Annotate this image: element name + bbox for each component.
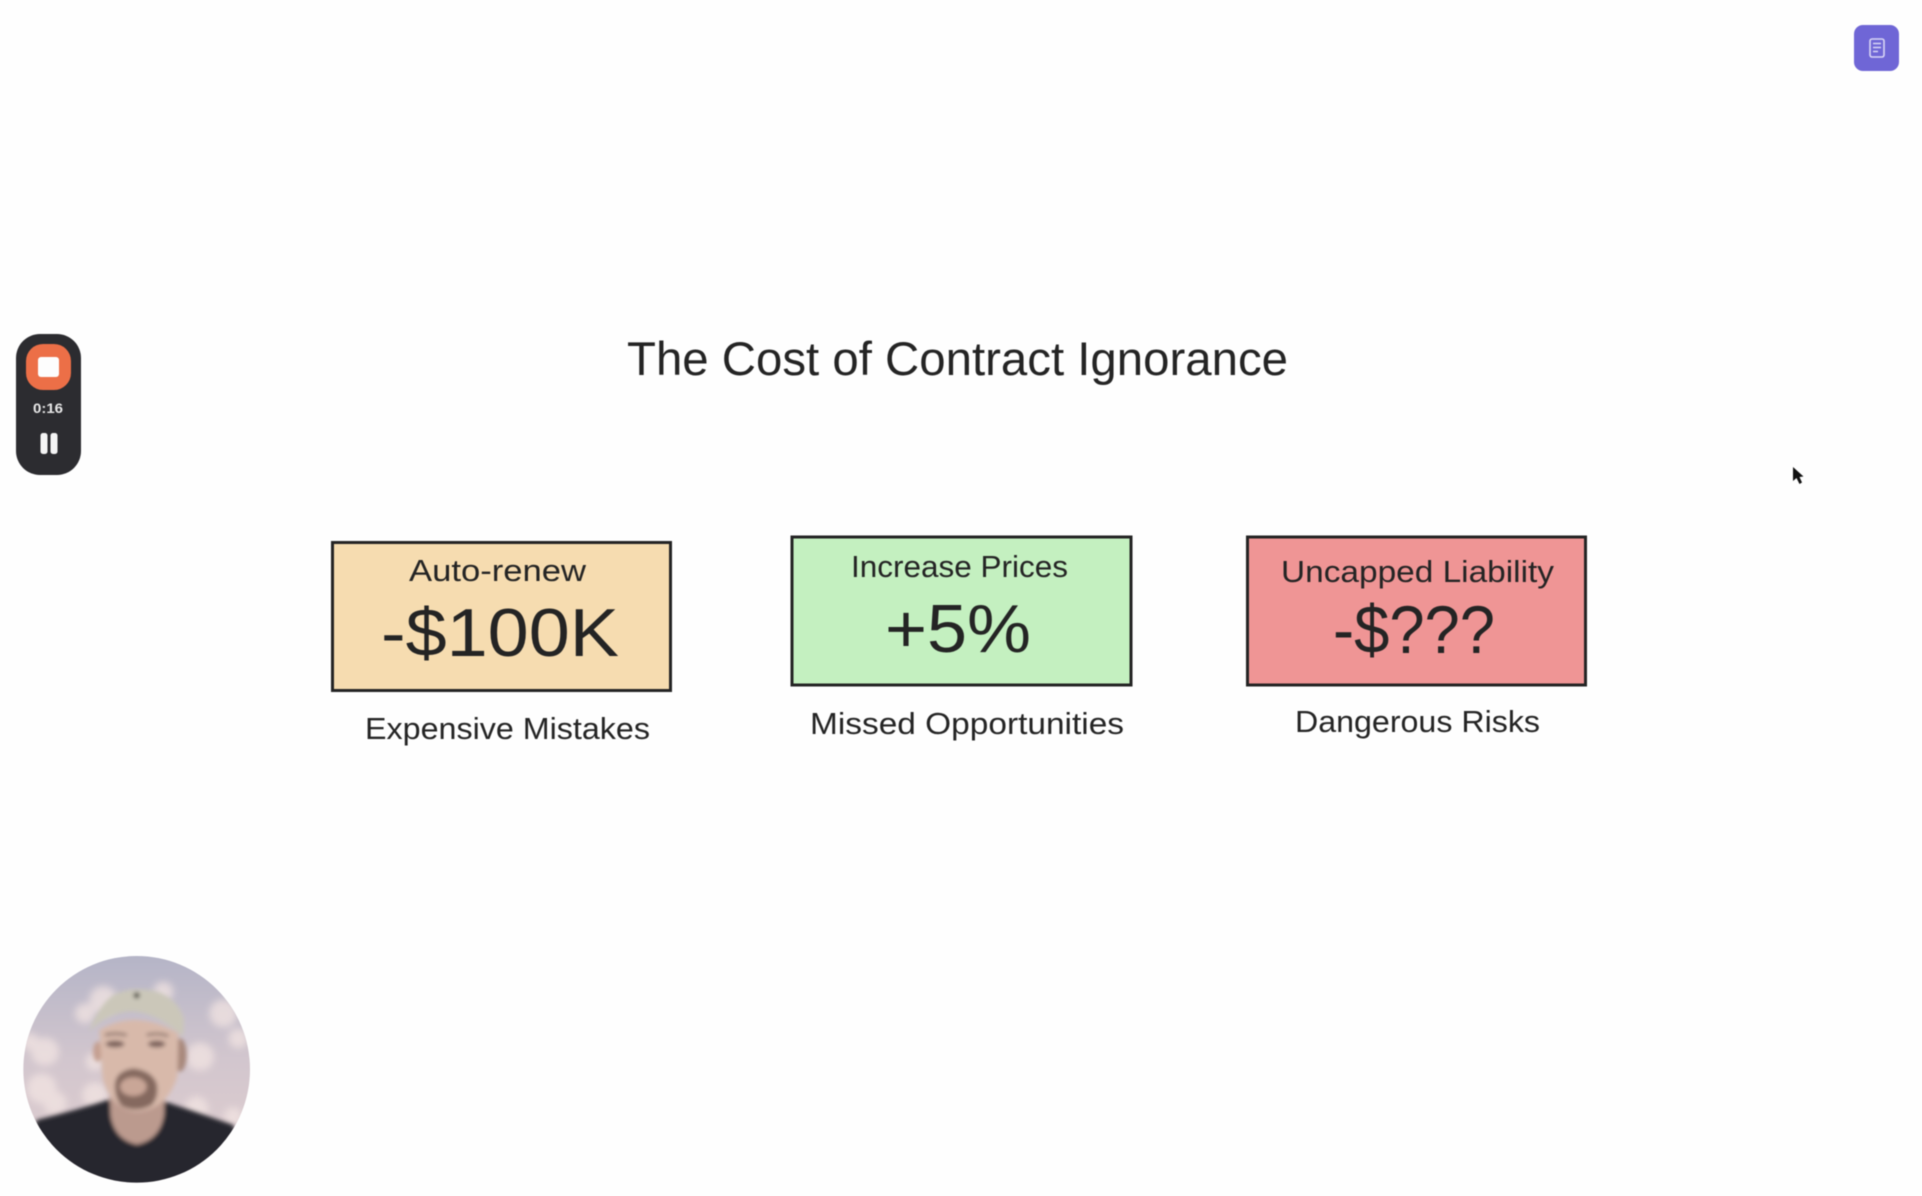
face bbox=[99, 1020, 178, 1112]
ears bbox=[93, 1042, 102, 1062]
beard bbox=[115, 1068, 157, 1109]
card value: +5% bbox=[885, 591, 1031, 667]
presenter webcam bubble bbox=[20, 953, 253, 1193]
notes button bbox=[1854, 25, 1899, 71]
neck bbox=[109, 1087, 165, 1145]
chin and mouth bbox=[120, 1077, 147, 1096]
card label: Auto-renew bbox=[409, 553, 587, 588]
panel: expensive mistakes bbox=[332, 542, 670, 746]
eyes bbox=[106, 1041, 124, 1047]
caption: Expensive Mistakes bbox=[365, 711, 650, 746]
panel: dangerous risks bbox=[1248, 537, 1586, 739]
cap bbox=[89, 989, 184, 1037]
icon: pause bbox=[40, 433, 58, 454]
card: uncapped liability bbox=[1248, 537, 1586, 685]
icon: stop button bbox=[26, 344, 71, 390]
timer: 0:16 bbox=[33, 400, 63, 416]
card label: Increase Prices bbox=[851, 549, 1068, 584]
icon: mouse cursor bbox=[1793, 467, 1804, 484]
recorder control pill bbox=[16, 334, 81, 475]
card value: -$??? bbox=[1333, 592, 1495, 668]
panel: missed opportunities bbox=[792, 537, 1131, 741]
card: increase prices bbox=[792, 537, 1131, 685]
card: auto-renew bbox=[332, 542, 670, 690]
icon: document bbox=[1870, 39, 1884, 57]
shirt bbox=[34, 1097, 236, 1184]
caption: Missed Opportunities bbox=[810, 706, 1124, 741]
card label: Uncapped Liability bbox=[1281, 554, 1555, 589]
title: The Cost of Contract Ignorance bbox=[627, 332, 1288, 385]
card value: -$100K bbox=[381, 595, 619, 671]
caption: Dangerous Risks bbox=[1295, 704, 1540, 739]
